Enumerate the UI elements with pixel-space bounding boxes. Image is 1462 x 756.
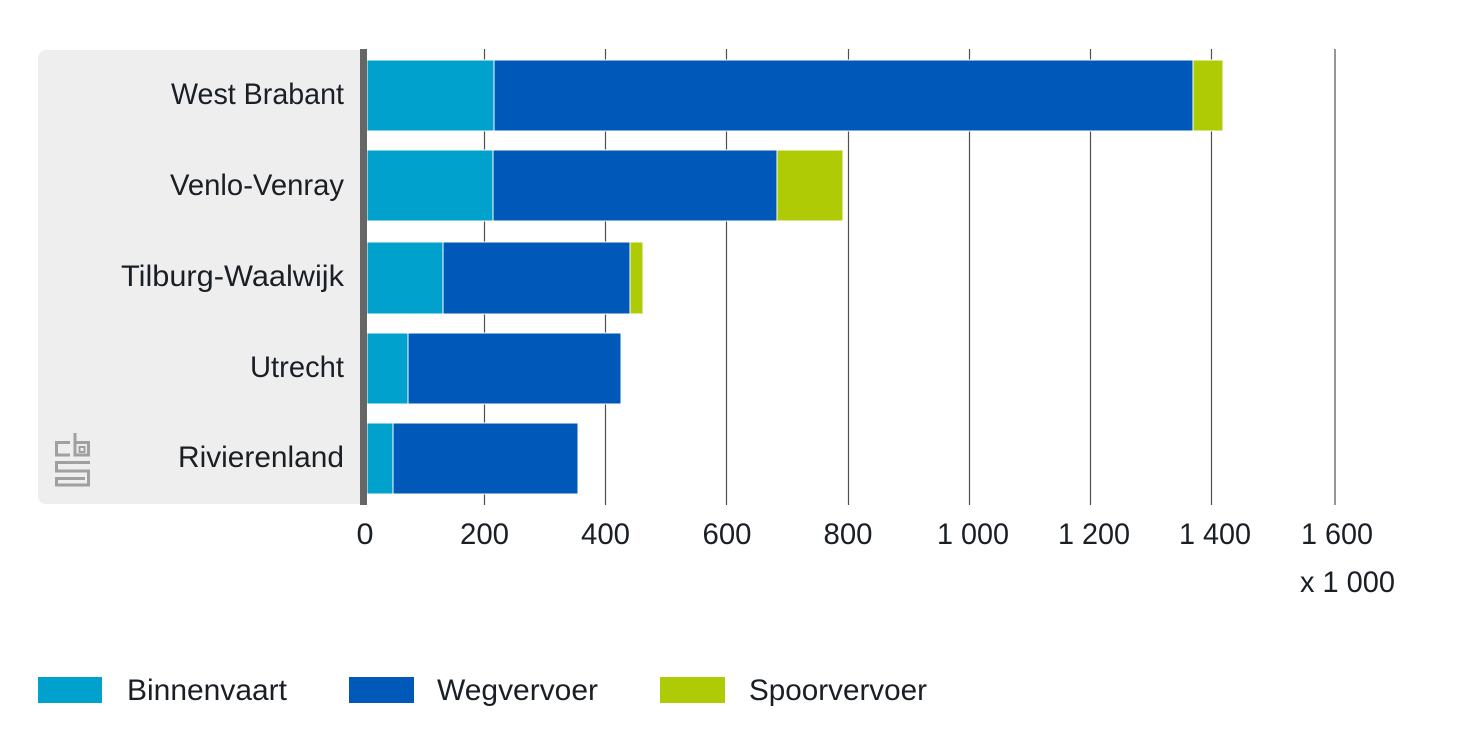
- category labels: Utrecht: [250, 351, 344, 384]
- bars: Tilburg-Waalwijk: [367, 242, 643, 314]
- x-axis tick labels: 1 600: [1301, 518, 1373, 551]
- x-axis tick labels: 1 200: [1058, 518, 1130, 551]
- legend: [38, 674, 927, 707]
- category labels: [121, 78, 344, 474]
- bars: West Brabant: [367, 60, 1223, 131]
- axis unit label: x 1 000: [1300, 566, 1395, 599]
- x-axis tick labels: [356, 518, 1373, 551]
- category labels: Rivierenland: [178, 441, 344, 474]
- legend item: Binnenvaart: Binnenvaart: [127, 674, 287, 707]
- category labels: Venlo-Venray: [170, 169, 344, 202]
- legend item: Wegvervoer: [349, 674, 598, 707]
- x-axis tick labels: 0: [356, 518, 374, 551]
- x-axis tick labels: 1 000: [937, 518, 1009, 551]
- x-axis tick labels: 1 400: [1179, 518, 1251, 551]
- category labels: Tilburg-Waalwijk: [121, 260, 344, 293]
- x-axis tick labels: 400: [581, 518, 630, 551]
- legend item: Binnenvaart: [38, 674, 287, 707]
- vertical axis: [360, 49, 367, 505]
- panel: grey category label background: [38, 50, 361, 504]
- bars: Rivierenland: [367, 423, 578, 494]
- icon: cbs logo: [56, 433, 90, 485]
- legend item: Spoorvervoer: [660, 674, 927, 707]
- legend item: Wegvervoer: Wegvervoer: [437, 674, 598, 707]
- bars: Utrecht: [367, 333, 621, 404]
- x-axis tick labels: 200: [460, 518, 509, 551]
- x-axis tick labels: 800: [824, 518, 872, 551]
- bars: Venlo-Venray: [367, 150, 843, 221]
- category labels: West Brabant: [171, 78, 344, 111]
- legend item: Spoorvervoer: Spoorvervoer: [749, 674, 927, 707]
- x-axis tick labels: 600: [702, 518, 752, 551]
